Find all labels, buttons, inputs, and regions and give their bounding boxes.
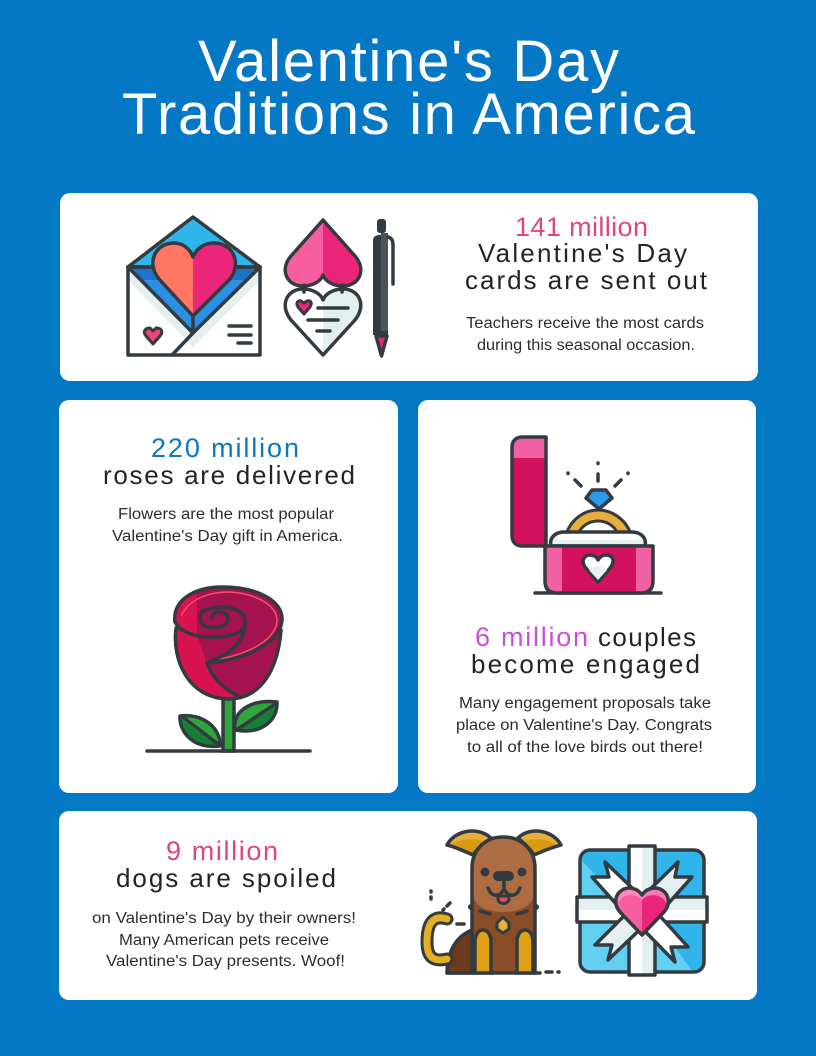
text: dogs: dogs are spoiled [116,863,336,893]
panel: engagements [418,400,756,793]
text: roses: Valentine's Day gift in America. [112,528,343,545]
icon: gift box with heart [577,846,707,975]
icon: pen [373,219,393,356]
icon: open envelope with heart [128,217,260,355]
text: engagements [456,622,712,756]
text: cards sent: Valentine's Day [478,238,687,268]
title [122,29,696,147]
text: engagements: couples [598,622,696,652]
text: cards sent: Teachers receive the most cards [466,315,704,332]
text: engagements: become engaged [471,649,700,679]
text: engagements: Many engagement proposals take [459,695,711,712]
panel: cards sent [60,193,758,381]
panel: roses [59,400,398,793]
text: roses: 220 million [151,433,299,463]
title: Valentine's Day [198,29,619,94]
icon: heart shaped love note [285,220,361,355]
text: roses [103,433,355,545]
text: roses: roses are delivered [103,460,355,490]
text: dogs: on Valentine's Day by their owners! [92,910,356,927]
icon: dog [427,831,561,973]
icon: rose [147,587,310,751]
text: dogs [92,836,356,970]
text: cards sent: during this seasonal occasion. [477,337,695,354]
text: dogs: Many American pets receive [119,932,329,949]
title: Traditions in America [122,82,696,147]
text: roses: Flowers are the most popular [118,506,334,523]
text: dogs: Valentine's Day presents. Woof! [106,953,345,970]
text: engagements: 6 million [475,622,588,652]
text: cards sent: 141 million [515,212,648,242]
text: cards sent [465,212,708,354]
text: cards sent: cards are sent out [465,265,708,295]
icon: ring box [512,437,661,593]
text: dogs: 9 million [166,836,278,866]
text: engagements: to all of the love birds out there! [467,739,703,756]
text: engagements: place on Valentine's Day. Congrats [456,717,712,734]
panel: dogs [59,811,757,1000]
